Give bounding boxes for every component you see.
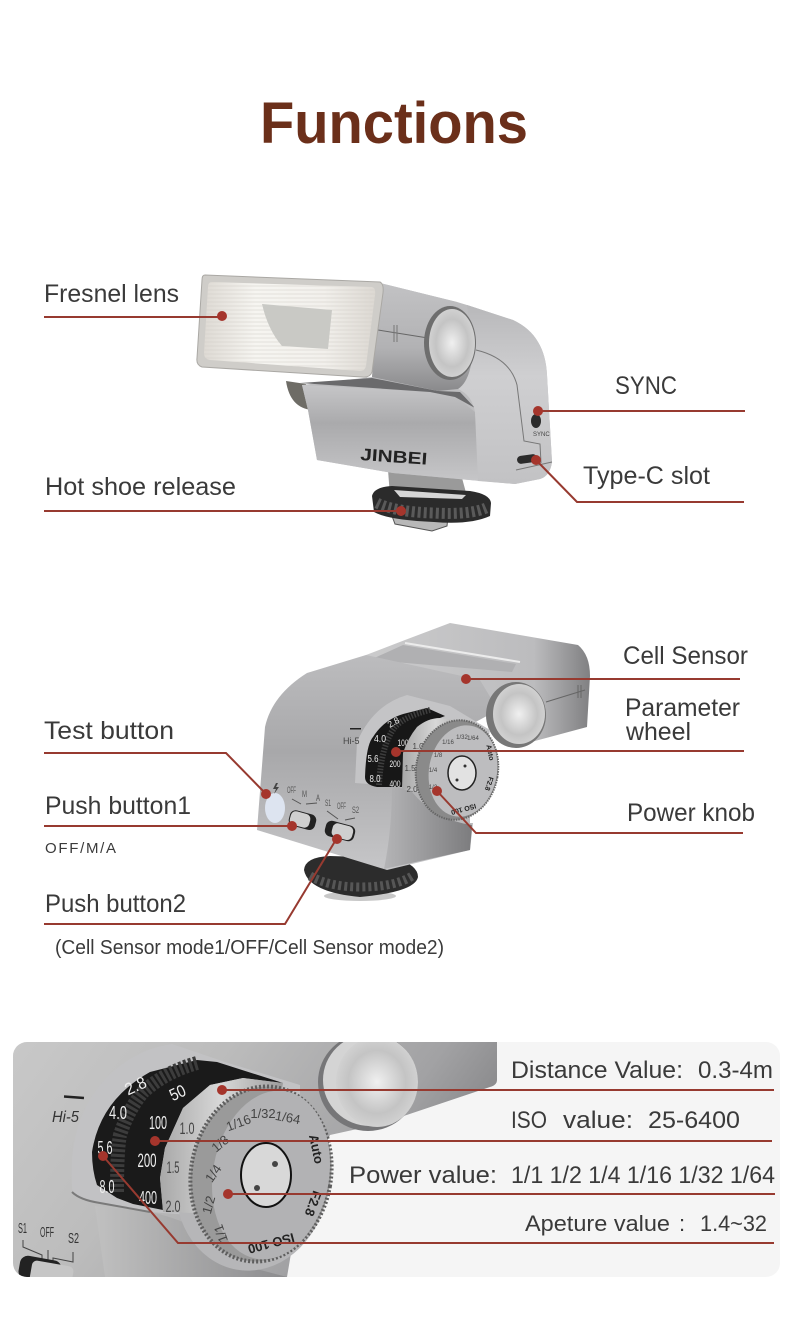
callout: push button 1 [44, 792, 297, 857]
lower right block [384, 785, 472, 869]
black scale rings: 8.0 [370, 774, 381, 785]
black scale rings [92, 1060, 283, 1210]
slide switch [18, 1256, 74, 1277]
callout: parameter wheel: wheel [625, 718, 691, 746]
mode labels: S2 [352, 805, 359, 815]
callout: iso value: 25-6400 [648, 1107, 740, 1134]
scale mark: Hi-5 [343, 736, 360, 746]
callout: push button 1: Push button1 [45, 792, 191, 820]
callout: power value: Power value: [349, 1162, 497, 1189]
mounting foot [304, 856, 418, 901]
callout: power value: 1/1 1/2 1/4 1/16 1/32 1/64 [511, 1162, 775, 1189]
mode labels: OFF [337, 801, 346, 811]
callout: push button 1: OFF/M/A [45, 840, 116, 857]
scale numbers: 4.0 [109, 1103, 127, 1123]
panel: close-up of dials [13, 1033, 780, 1289]
dial well lip [355, 695, 490, 806]
mode labels: M [302, 789, 307, 799]
dial markings: 1/64 [467, 736, 479, 742]
dial markings: 1/8 [434, 753, 443, 759]
mode labels: OFF [40, 1224, 54, 1241]
large side knob [486, 682, 546, 748]
lens bezel [197, 275, 383, 377]
barrel numbers [404, 742, 424, 794]
mode labels: S2 [68, 1230, 79, 1247]
lower base [302, 385, 480, 481]
callout: parameter wheel [391, 694, 744, 757]
dial markings: 1/32 [250, 1106, 276, 1121]
flash photo: front view: SYNC [533, 432, 550, 438]
lower body shadow [168, 1218, 286, 1277]
flash bolt icon [273, 783, 279, 794]
hot shoe plate [392, 516, 448, 531]
callout: iso value [150, 1107, 772, 1146]
scale numbers: 400 [139, 1188, 157, 1208]
title: Functions [260, 91, 528, 156]
callout: parameter wheel: Parameter [625, 694, 740, 722]
dial markings: 1/16 [224, 1111, 253, 1134]
shadow under head [300, 378, 475, 408]
scale numbers: 1.0 [180, 1119, 194, 1138]
scale numbers [98, 1073, 194, 1216]
usb-c slot [517, 454, 537, 464]
dial markings: 1/4 [429, 768, 438, 774]
dial well lip [115, 1060, 300, 1214]
callout: test button [44, 717, 271, 799]
callout: fresnel lens [44, 280, 227, 321]
callout: test button: Test button [44, 717, 174, 745]
callout: hot shoe release [44, 473, 406, 516]
callout: iso value: ISO [511, 1107, 547, 1134]
black scale rings: 200 [390, 759, 400, 769]
flash photo: rear view [257, 623, 590, 901]
callout: push button 2 [44, 834, 444, 959]
barrel numbers: 2.0 [406, 785, 418, 794]
fresnel lens [204, 282, 375, 371]
callout: sync: SYNC [615, 372, 677, 400]
dial markings: 1/4 [202, 1162, 225, 1185]
dial markings: ISO 100 [246, 1230, 296, 1257]
dial markings: 1/64 [274, 1108, 302, 1127]
silver barrel [402, 718, 470, 790]
black scale rings: 100 [398, 738, 408, 748]
brand logo: JINBEI [360, 445, 428, 469]
dial markings: 1/1 [211, 1222, 231, 1245]
mode labels: S1 [18, 1220, 27, 1237]
scale numbers: 2.0 [166, 1197, 180, 1216]
shoe neck [388, 470, 468, 500]
power dial face [422, 720, 504, 822]
top panel [366, 623, 590, 745]
body silhouette [302, 283, 552, 484]
callout: power knob: Power knob [627, 799, 755, 827]
callout: distance value: 0.3-4m [698, 1057, 773, 1084]
ribbed knob [372, 486, 491, 523]
callout: type-c slot [531, 455, 744, 502]
dial markings: Auto [484, 744, 495, 761]
mode labels [18, 1223, 79, 1263]
dial markings: 1/16 [442, 740, 454, 746]
panel background [287, 1042, 780, 1277]
dial markings: 1/2 [429, 785, 438, 791]
callout: push button 2: (Cell Sensor mode1/OFF/Cell Sensor mode2) [55, 937, 444, 959]
scale mark [343, 728, 361, 746]
scale numbers: 50 [166, 1081, 189, 1105]
centre disc [241, 1143, 291, 1207]
dial markings: ISO 100 [450, 802, 477, 815]
upper head [372, 283, 473, 391]
barrel numbers: 1.5 [404, 764, 416, 773]
dial markings: 1/32 [456, 735, 468, 741]
dial markings: Auto [306, 1133, 327, 1165]
black scale rings: 4.0 [374, 734, 386, 745]
callout: aperture value: 1.4~32 [700, 1211, 767, 1236]
slide switch 1 [287, 809, 318, 831]
body silver [13, 1042, 497, 1277]
power dial face [212, 1091, 330, 1260]
callout: aperture value: : [679, 1211, 685, 1236]
mode labels: S1 [325, 798, 331, 808]
callout: distance value: Distance Value: [511, 1057, 683, 1084]
callout: fresnel lens: Fresnel lens [44, 280, 179, 308]
callout: cell sensor [461, 642, 748, 684]
dial markings [429, 735, 495, 815]
mode labels: OFF [287, 785, 296, 795]
centre disc [448, 756, 476, 790]
black scale rings [365, 708, 445, 789]
dial base [179, 1208, 324, 1270]
right column [458, 305, 552, 484]
large side knob [318, 1033, 418, 1131]
main body [257, 655, 498, 870]
callout: power knob [432, 786, 755, 833]
scale numbers: 200 [138, 1151, 156, 1172]
slide switch 2 [323, 819, 357, 843]
black scale rings: 2.8 [386, 715, 401, 730]
black scale rings: 5.6 [368, 754, 379, 765]
dial markings: F2.8 [302, 1189, 325, 1218]
rear knurled wheel [286, 381, 312, 410]
scale numbers: 5.6 [98, 1138, 112, 1158]
test button [265, 793, 285, 823]
callout: iso value: value: [563, 1107, 633, 1134]
callout: push button 2: Push button2 [45, 890, 186, 918]
dial markings [202, 1108, 322, 1254]
sync socket [531, 414, 541, 428]
callout: hot shoe release: Hot shoe release [45, 473, 236, 501]
callout: sync [533, 372, 745, 416]
mode labels: A [316, 793, 320, 803]
scale mark [52, 1095, 84, 1122]
scale numbers: 2.8 [122, 1073, 150, 1099]
scale numbers: 1.5 [166, 1158, 180, 1177]
black scale rings: 400 [390, 779, 400, 789]
silver barrel [160, 1078, 283, 1215]
scale numbers: 100 [149, 1113, 167, 1133]
callout: type-c slot: Type-C slot [583, 462, 710, 490]
head dial [424, 306, 476, 380]
dial markings: 1/8 [208, 1132, 232, 1155]
scale numbers: 8.0 [100, 1177, 114, 1197]
ring tick band [117, 1063, 197, 1192]
dial markings: F2.8 [483, 776, 494, 791]
callout: power value [223, 1162, 775, 1199]
knurled power dial [188, 1084, 334, 1264]
dial markings: 1/2 [199, 1194, 218, 1216]
callout: aperture value: Apeture value [525, 1211, 670, 1236]
callout: aperture value [98, 1151, 774, 1243]
flash photo: front view [197, 275, 552, 531]
mode labels [287, 785, 359, 820]
barrel numbers: 1.0 [412, 742, 424, 751]
knurled power dial [408, 714, 506, 826]
lens flash tube [262, 304, 332, 349]
callout: cell sensor: Cell Sensor [623, 642, 748, 670]
callout: distance value [217, 1057, 774, 1095]
scale mark: Hi-5 [52, 1109, 79, 1126]
